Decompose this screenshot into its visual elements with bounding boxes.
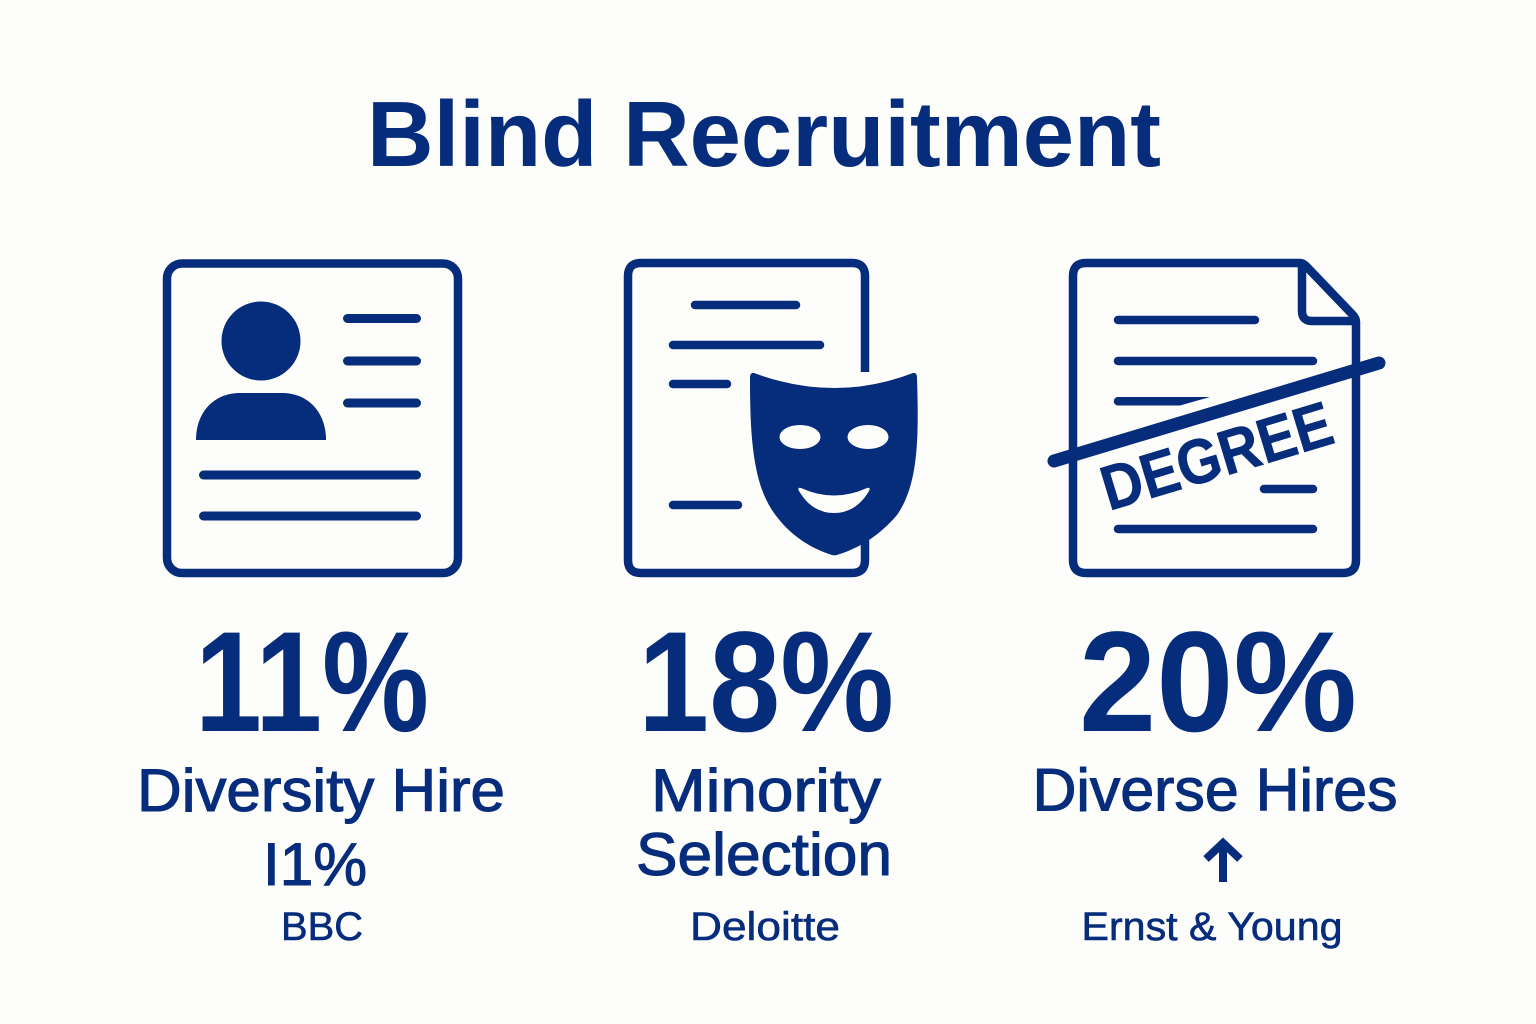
secondary value: I1%: I1% (263, 831, 367, 898)
label: minority selection: Minority (651, 757, 881, 824)
icon: resume with mask (628, 263, 918, 573)
label: minority selection: Selection (636, 821, 892, 888)
source: Ernst and Young: Ernst & Young (1082, 905, 1342, 949)
label: minority selection (636, 757, 892, 888)
source: BBC: BBC (281, 905, 363, 949)
title: Blind Recruitment (367, 82, 1161, 186)
stat: 11%: 11% (195, 603, 429, 762)
icon: up arrow (1206, 843, 1240, 882)
stat: 18%: 18% (638, 603, 894, 762)
icon: resume with person (167, 264, 458, 573)
label: diverse hires: Diverse Hires (1032, 756, 1398, 824)
degree label: DEGREE (1093, 389, 1341, 524)
source: Deloitte: Deloitte (690, 905, 840, 949)
label: diversity hire: Diversity Hire (137, 757, 505, 824)
stat: 20%: 20% (1079, 603, 1357, 762)
icon: document with struck degree (1054, 263, 1379, 573)
